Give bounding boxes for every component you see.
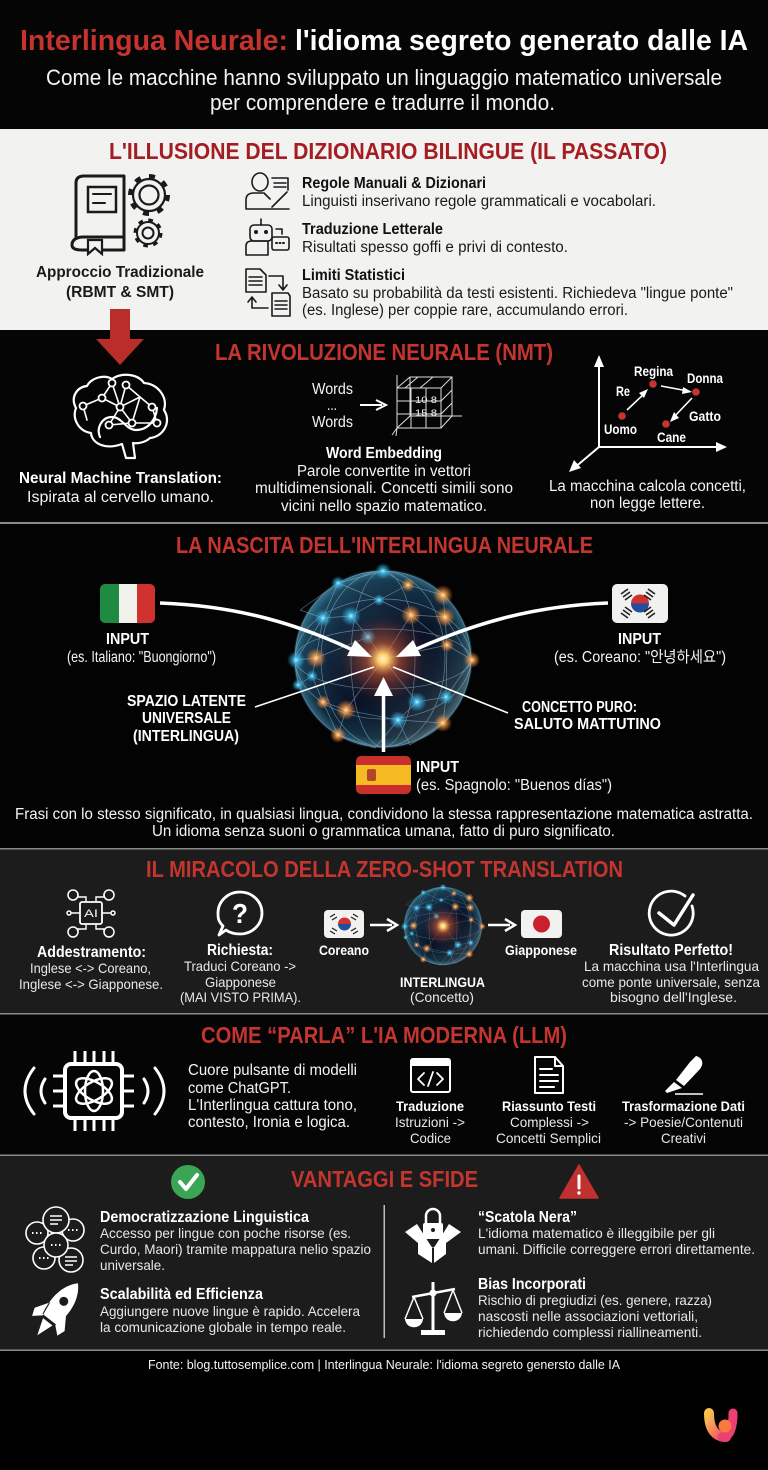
text: risultato perfetto — [582, 942, 760, 1005]
subtitle — [46, 65, 722, 115]
icon: check circle — [649, 891, 693, 935]
flag: Korea small — [324, 910, 364, 938]
text: addestramento: Inglese <-> Giapponese. — [19, 976, 163, 992]
icon: linguist — [246, 173, 289, 209]
text: bias incorporati: richiedendo complessi riallineamenti. — [478, 1324, 702, 1340]
label: words: Words — [312, 381, 353, 398]
text: richiesta: Richiesta: — [207, 942, 273, 959]
flag: South Korea — [612, 584, 668, 623]
text: riassunto testi — [496, 1098, 601, 1146]
item: regole manuali — [302, 175, 656, 210]
label: words — [312, 381, 353, 431]
title: l'idioma segreto generato dalle IA — [295, 25, 748, 57]
icon: warning triangle — [560, 1165, 598, 1198]
item: regole manuali: Regole Manuali & Dizionari — [302, 175, 486, 192]
caption: macchina calcola — [549, 478, 746, 512]
text: cuore pulsante: L'Interlingua cattura tono, — [188, 1097, 357, 1114]
text: trasformazione dati: Trasformazione Dati — [622, 1098, 745, 1114]
label: input italiano: INPUT — [106, 631, 149, 648]
text: riassunto testi: Concetti Semplici — [496, 1130, 601, 1146]
arrow: sphere to japan — [488, 919, 515, 931]
text: word embedding: vicini nello spazio matematico. — [281, 498, 487, 515]
text: explanation — [15, 806, 753, 840]
icon: AI chip: AI — [84, 908, 98, 920]
text: cuore pulsante: contesto, Ironia e logica. — [188, 1114, 350, 1131]
icon: chip with knot — [25, 1051, 164, 1131]
icon: chat bubbles — [26, 1207, 84, 1272]
text: word embedding: Word Embedding — [326, 445, 442, 462]
icon: brain — [74, 375, 167, 458]
label: input coreano: INPUT — [618, 631, 661, 648]
divider — [384, 1205, 385, 1338]
text: risultato perfetto: Risultato Perfetto! — [609, 942, 733, 959]
text: democratizzazione: Democratizzazione Linguistica — [100, 1209, 309, 1226]
text: trasformazione dati: -> Poesie/Contenuti — [624, 1114, 743, 1130]
label: input italiano: (es. Italiano: "Buongiorno") — [67, 649, 216, 666]
text: risultato perfetto: come ponte universale, senza — [582, 974, 760, 990]
chart: vector space: Donna — [687, 370, 723, 386]
icon: robot — [246, 219, 289, 255]
footer source: Fonte: blog.tuttosemplice.com | Interlingua Neurale: l'idioma segreto genersto dalle IA — [148, 1358, 621, 1372]
caption: macchina calcola: non legge lettere. — [590, 495, 705, 512]
text: explanation: Un idioma senza suoni o grammatica umana, fatto di puro significato. — [152, 823, 615, 840]
label: neural machine translation — [19, 470, 222, 506]
panel: nascita interlingua — [16, 537, 752, 840]
arrow: korean input — [396, 603, 608, 657]
text: democratizzazione: Accesso per lingue con poche risorse (es. — [100, 1225, 351, 1241]
label: concetto puro — [514, 699, 661, 733]
text: richiesta: Giapponese — [205, 974, 276, 990]
text: bias incorporati: Rischio di pregiudizi (es. genere, razza) — [478, 1292, 712, 1308]
item: traduzione letterale: Risultati spesso goffi e privi di contesto. — [302, 239, 568, 256]
text: traduzione: Traduzione — [396, 1098, 464, 1114]
text: scatola nera: L'idioma matematico è illeggibile per gli — [478, 1225, 715, 1241]
icon: scales — [405, 1282, 462, 1335]
label: spazio latente universale: (INTERLINGUA) — [133, 728, 239, 745]
panel: come parla LLM — [0, 1014, 768, 1154]
icon: embedding cube: 15 8 — [415, 408, 437, 418]
label: input spagnolo: (es. Spagnolo: "Buenos días") — [416, 777, 612, 794]
label: neural machine translation: Neural Machine Translation: — [19, 470, 222, 487]
text: scalabilita: Scalabilità ed Efficienza — [100, 1286, 263, 1303]
text: addestramento — [19, 944, 163, 992]
item: limiti statistici: (es. Inglese) per coppie rare, accumulando errori. — [302, 302, 628, 319]
arrow: spanish input — [374, 677, 393, 752]
label: approccio tradizionale — [36, 264, 204, 301]
icon: AI chip — [67, 890, 115, 937]
heading: VANTAGGI E SFIDE — [291, 1166, 478, 1192]
chart: vector space — [569, 355, 727, 472]
label: neural machine translation: Ispirata al cervello umano. — [27, 489, 214, 506]
item: limiti statistici: Basato su probabilità da testi esistenti. Richiedeva "lingue ponte" — [302, 285, 733, 302]
text: richiesta — [180, 942, 301, 1005]
text: scatola nera: “Scatola Nera” — [478, 1209, 577, 1226]
icon: question bubble: ? — [232, 898, 248, 929]
chart: vector space: Cane — [657, 429, 686, 445]
heading: LA NASCITA DELL'INTERLINGUA NEURALE — [176, 532, 593, 558]
icon: book and gears — [72, 176, 168, 254]
chart: vector space: Gatto — [689, 408, 721, 424]
text: word embedding: Parole convertite in vettori — [297, 463, 471, 480]
icon: documents with arrows — [246, 269, 290, 316]
text: riassunto testi: Riassunto Testi — [502, 1098, 596, 1114]
chart: vector space: Regina — [634, 363, 673, 379]
label: input spagnolo: INPUT — [416, 759, 459, 776]
icon: green check — [171, 1165, 205, 1199]
icon: fountain pen — [665, 1056, 703, 1094]
text: trasformazione dati — [622, 1098, 745, 1146]
chart: vector space: Uomo — [604, 421, 637, 437]
labels: flow: Coreano — [319, 942, 369, 958]
arrow: red down arrow — [96, 309, 144, 365]
labels: flow: INTERLINGUA — [400, 974, 485, 990]
icon: logo — [709, 1413, 733, 1437]
title — [20, 25, 748, 57]
text: word embedding — [255, 445, 513, 515]
panel: header — [0, 0, 768, 129]
icon: locked box — [405, 1209, 461, 1263]
text: richiesta: Traduci Coreano -> — [184, 958, 296, 974]
label: input coreano — [554, 631, 726, 666]
subtitle: Come le macchine hanno sviluppato un linguaggio matematico universale — [46, 65, 722, 90]
text: scalabilita: la comunicazione globale in tempo reale. — [100, 1319, 346, 1335]
sphere: small interlingua — [401, 884, 486, 966]
label: spazio latente universale — [127, 693, 246, 745]
text: explanation: Frasi con lo stesso significato, in qualsiasi lingua, condividono la stessa rappresentazione matematica astratta. — [15, 806, 753, 823]
label: words: ... — [327, 397, 337, 414]
text: addestramento: Addestramento: — [37, 944, 146, 961]
leader line: concetto puro — [393, 667, 508, 713]
label: concetto puro: CONCETTO PURO: — [522, 699, 637, 716]
text: cuore pulsante: Cuore pulsante di modelli — [188, 1062, 357, 1079]
label: input italiano — [67, 631, 216, 666]
text: risultato perfetto: bisogno dell'Inglese. — [610, 989, 737, 1005]
text: addestramento: Inglese <-> Coreano, — [30, 960, 151, 976]
text: scalabilita: Aggiungere nuove lingue è rapido. Accelera — [100, 1303, 360, 1319]
heading: L'ILLUSIONE DEL DIZIONARIO BILINGUE (IL PASSATO) — [109, 138, 667, 164]
arrow: italian input — [160, 603, 372, 657]
chart: vector space: Re — [616, 383, 630, 399]
icon: embedding cube — [392, 375, 462, 436]
sphere: latent space — [287, 563, 480, 749]
subtitle: per comprendere e tradurre il mondo. — [210, 90, 555, 115]
label: spazio latente universale: SPAZIO LATENTE — [127, 693, 246, 710]
labels: flow: (Concetto) — [410, 989, 474, 1005]
text: scatola nera — [478, 1209, 755, 1257]
item: limiti statistici: Limiti Statistici — [302, 267, 405, 284]
icon: question bubble — [218, 892, 262, 935]
text: risultato perfetto: La macchina usa l'Interlingua — [584, 958, 759, 974]
title: Interlingua Neurale: — [20, 25, 288, 57]
label: input coreano: (es. Coreano: "안녕하세요") — [554, 648, 726, 666]
heading: IL MIRACOLO DELLA ZERO-SHOT TRANSLATION — [146, 856, 623, 882]
text: traduzione: Codice — [410, 1130, 451, 1146]
label: words: Words — [312, 414, 353, 431]
icon: document — [535, 1057, 563, 1093]
item: traduzione letterale — [302, 221, 568, 256]
label: spazio latente universale: UNIVERSALE — [142, 710, 231, 727]
label: approccio tradizionale: (RBMT & SMT) — [66, 284, 174, 301]
heading: COME “PARLA” L'IA MODERNA (LLM) — [201, 1022, 567, 1048]
label: input spagnolo — [416, 759, 612, 794]
panel: vantaggi e sfide — [0, 1154, 768, 1351]
icon: embedding cube: 10 8 — [415, 395, 437, 405]
item: regole manuali: Linguisti inserivano regole grammaticali e vocabolari. — [302, 193, 656, 210]
text: scatola nera: umani. Difficile correggere errori direttamente. — [478, 1241, 755, 1257]
labels: flow: Giapponese — [505, 942, 577, 958]
text: riassunto testi: Complessi -> — [510, 1114, 589, 1130]
text: cuore pulsante: come ChatGPT. — [188, 1080, 291, 1097]
flag: Italy — [100, 584, 155, 623]
text: traduzione — [395, 1098, 465, 1146]
labels: flow — [319, 942, 577, 1005]
text: democratizzazione: Curdo, Maori) tramite mappatura nelio spazio — [100, 1241, 371, 1257]
panel: dizionario bilingue — [0, 129, 768, 330]
text: word embedding: multidimensionali. Concetti simili sono — [255, 480, 513, 497]
flag: Japan — [521, 910, 562, 938]
icon: rocket — [22, 1272, 93, 1347]
label: concetto puro: SALUTO MATTUTINO — [514, 716, 661, 733]
icon: code window — [411, 1059, 450, 1092]
leader line: spazio latente — [255, 667, 374, 707]
text: bias incorporati: nascosti nelle associazioni vettoriali, — [478, 1308, 698, 1324]
text: trasformazione dati: Creativi — [661, 1130, 706, 1146]
text: scalabilita — [100, 1286, 360, 1335]
flag: Spain — [356, 756, 411, 794]
text: democratizzazione: universale. — [100, 1257, 165, 1273]
heading: LA RIVOLUZIONE NEURALE (NMT) — [215, 339, 553, 365]
panel: rivoluzione neurale — [0, 330, 768, 524]
text: traduzione: Istruzioni -> — [395, 1114, 465, 1130]
text: cuore pulsante — [188, 1062, 357, 1131]
item: traduzione letterale: Traduzione Letterale — [302, 221, 443, 238]
caption: macchina calcola: La macchina calcola concetti, — [549, 478, 746, 495]
text: democratizzazione — [100, 1209, 371, 1273]
item: limiti statistici — [302, 267, 733, 319]
arrow: words to cube — [360, 400, 386, 410]
text: richiesta: (MAI VISTO PRIMA). — [180, 989, 301, 1005]
label: approccio tradizionale: Approccio Tradizionale — [36, 264, 204, 281]
arrow: korea to sphere — [370, 919, 397, 931]
text: bias incorporati — [478, 1276, 712, 1340]
panel: zero-shot translation — [0, 848, 768, 1014]
text: bias incorporati: Bias Incorporati — [478, 1276, 586, 1293]
